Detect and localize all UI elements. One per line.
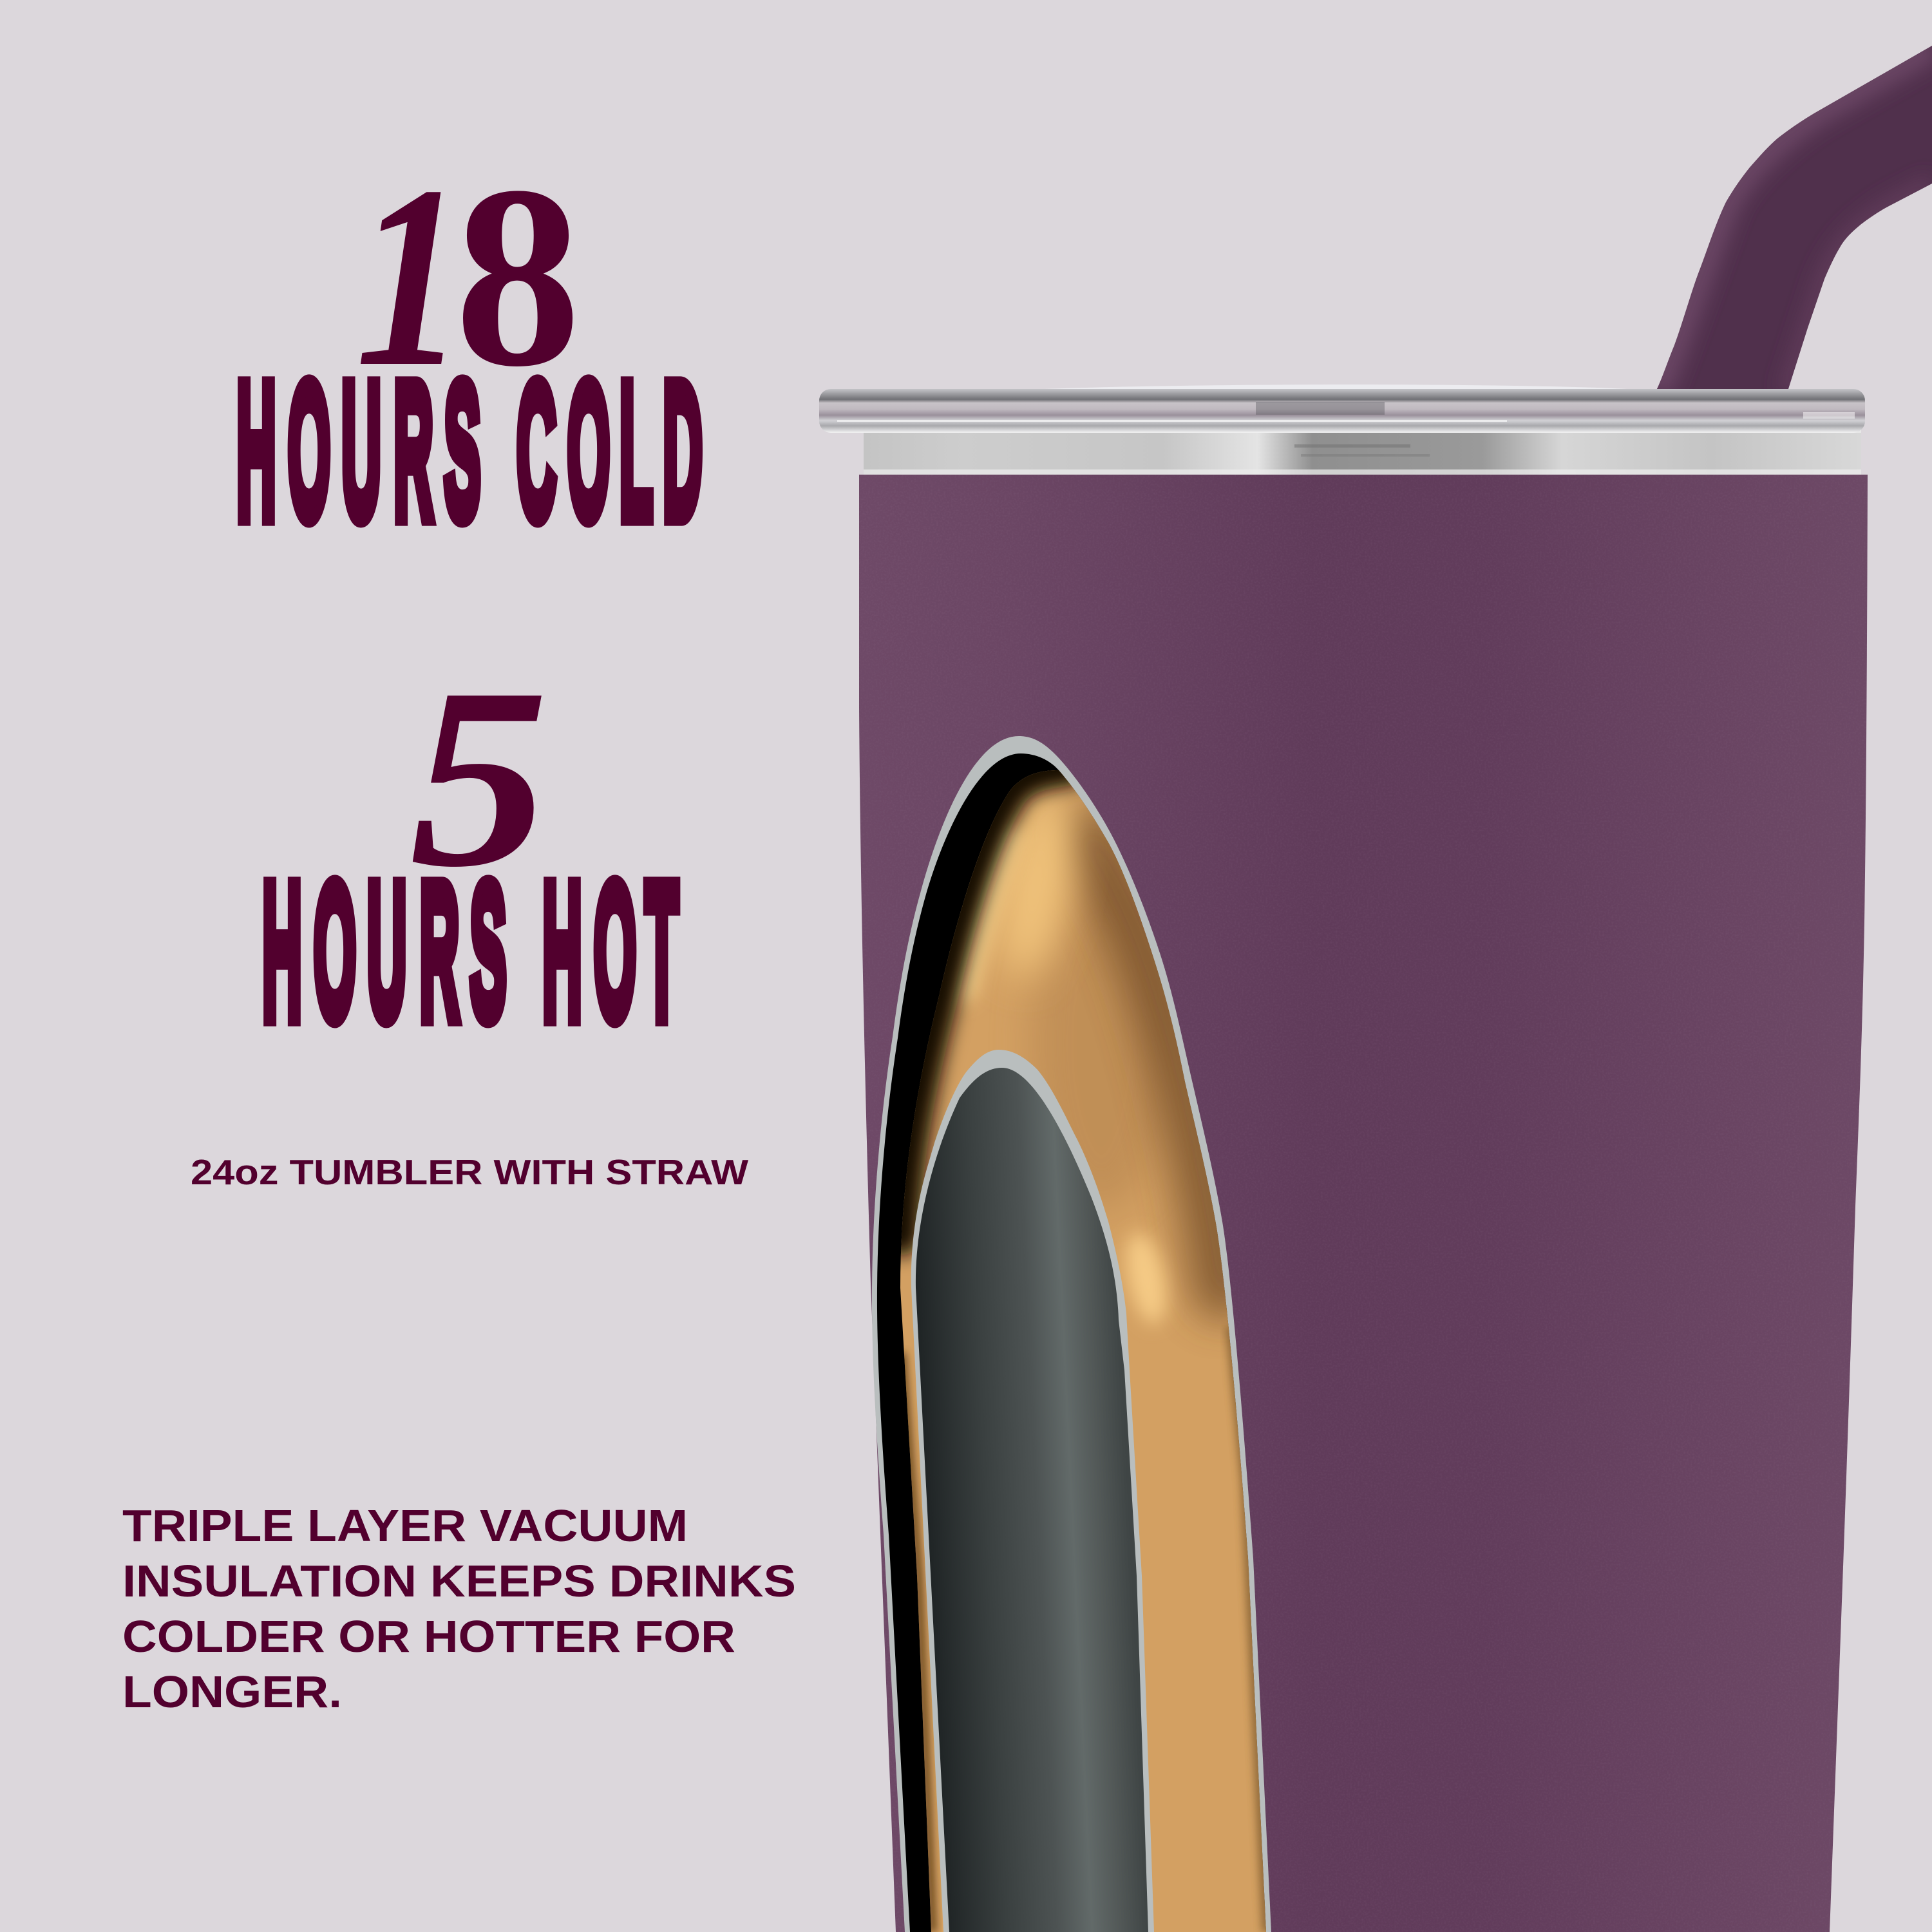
label: hours hot: HOURS HOT	[262, 845, 678, 1059]
tumbler body	[857, 475, 1871, 1932]
description text: LONGER.	[122, 1667, 342, 1717]
number 18	[355, 133, 581, 421]
number 18: 1	[355, 133, 465, 421]
description text: COLDER OR HOTTER FOR	[122, 1611, 735, 1662]
number 18: 8	[455, 133, 581, 421]
copper layer	[889, 753, 1275, 1932]
dark shading towards the gap	[900, 766, 1069, 1236]
inner dark layer	[916, 1068, 1148, 1932]
straw	[1649, 39, 1932, 399]
cutaway: triple layer insulation	[872, 736, 1275, 1932]
steel rim	[864, 428, 1861, 475]
number 5: 5	[410, 635, 549, 920]
inner layer steel edge	[911, 1050, 1154, 1932]
upper mid tone	[1030, 876, 1172, 1211]
outer steel edge	[872, 736, 1271, 1932]
description text: INSULATION KEEPS DRINKS	[122, 1556, 796, 1606]
product name: 24oz TUMBLER WITH STRAW	[191, 1152, 748, 1192]
label: hours cold: HOURS COLD	[236, 345, 703, 558]
vacuum gap	[877, 753, 1266, 1932]
clear lid	[819, 384, 1865, 433]
brown shading on right	[1088, 837, 1224, 1288]
tumbler illustration	[819, 39, 1932, 1932]
description text	[122, 1501, 796, 1717]
heading: 18 hours cold	[236, 133, 703, 558]
heading: 5 hours hot	[262, 635, 678, 1059]
warm highlights	[989, 782, 1085, 983]
description text: TRIPLE LAYER VACUUM	[122, 1501, 688, 1551]
